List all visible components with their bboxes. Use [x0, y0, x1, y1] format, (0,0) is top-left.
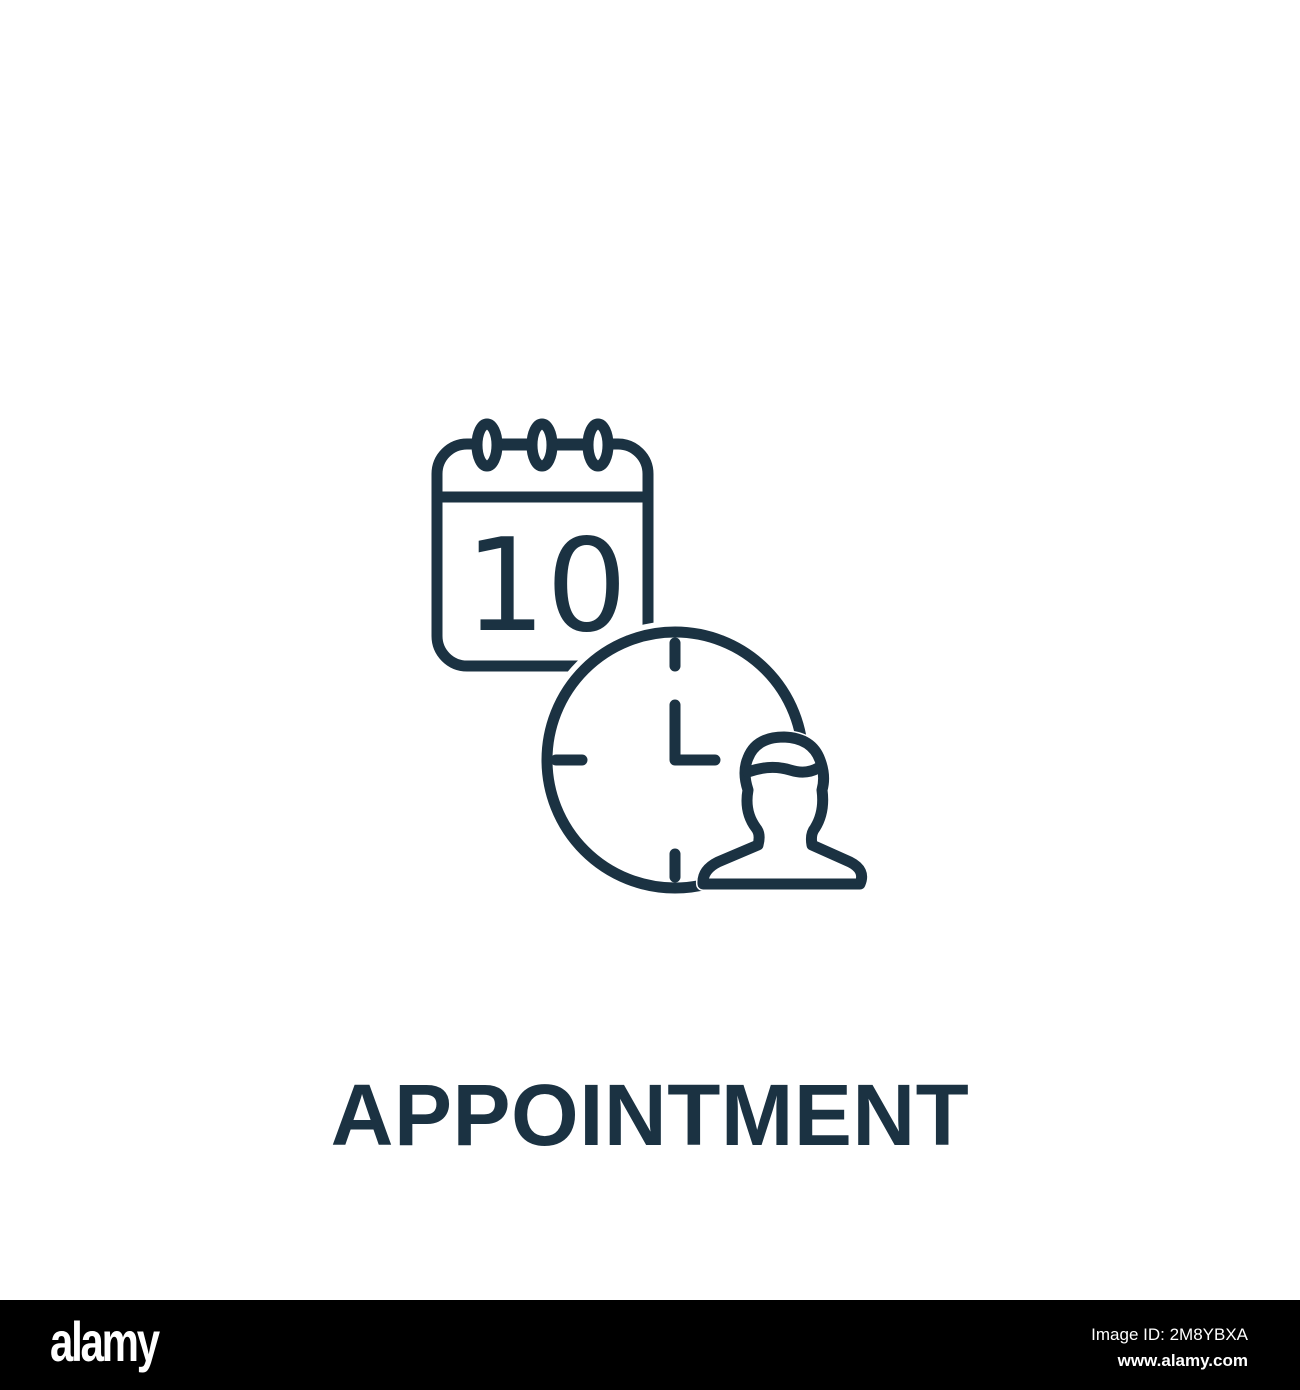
icon: appointment [432, 418, 868, 894]
footer bar [0, 1300, 1300, 1390]
icon: calendar [437, 424, 648, 666]
title: APPOINTMENT [331, 1067, 969, 1164]
image id text: www.alamy.com [1118, 1351, 1248, 1370]
image id text: Image ID: 2M8YBXA [1091, 1325, 1248, 1344]
logo: alamy [50, 1310, 158, 1373]
icon: calendar: 10 [465, 512, 627, 661]
icon: person [703, 737, 862, 884]
image id text [1091, 1325, 1248, 1370]
icon: clock [541, 626, 809, 894]
